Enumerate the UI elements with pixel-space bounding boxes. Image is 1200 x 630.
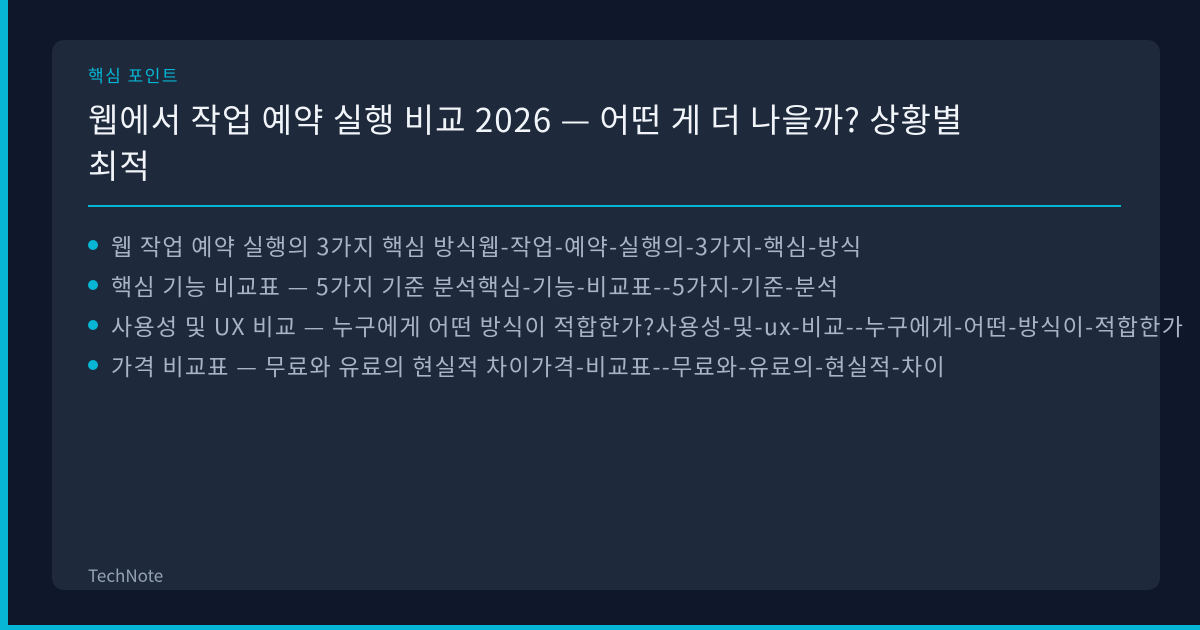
bullet 4: 가격 비교표 — 무료와 유료의 현실적 차이가격-비교표--무료와-유료의-현실적-차이 — [111, 348, 946, 382]
bullet list — [88, 228, 1184, 382]
bullet 3: 사용성 및 UX 비교 — 누구에게 어떤 방식이 적합한가?사용성-및-ux-비교--누구에게-어떤-방식이-적합한가 — [111, 308, 1184, 342]
title: 최적 — [88, 140, 151, 188]
footer brand: TechNote — [88, 562, 163, 587]
bullet 1: 웹 작업 예약 실행의 3가지 핵심 방식웹-작업-예약-실행의-3가지-핵심-방식 — [111, 228, 862, 262]
bullet 2: 핵심 기능 비교표 — 5가지 기준 분석핵심-기능-비교표--5가지-기준-분석 — [111, 268, 839, 302]
kicker label: 핵심 포인트 — [88, 62, 179, 87]
title: 웹에서 작업 예약 실행 비교 2026 — 어떤 게 더 나을까? 상황별 — [88, 94, 963, 142]
title — [88, 94, 963, 188]
